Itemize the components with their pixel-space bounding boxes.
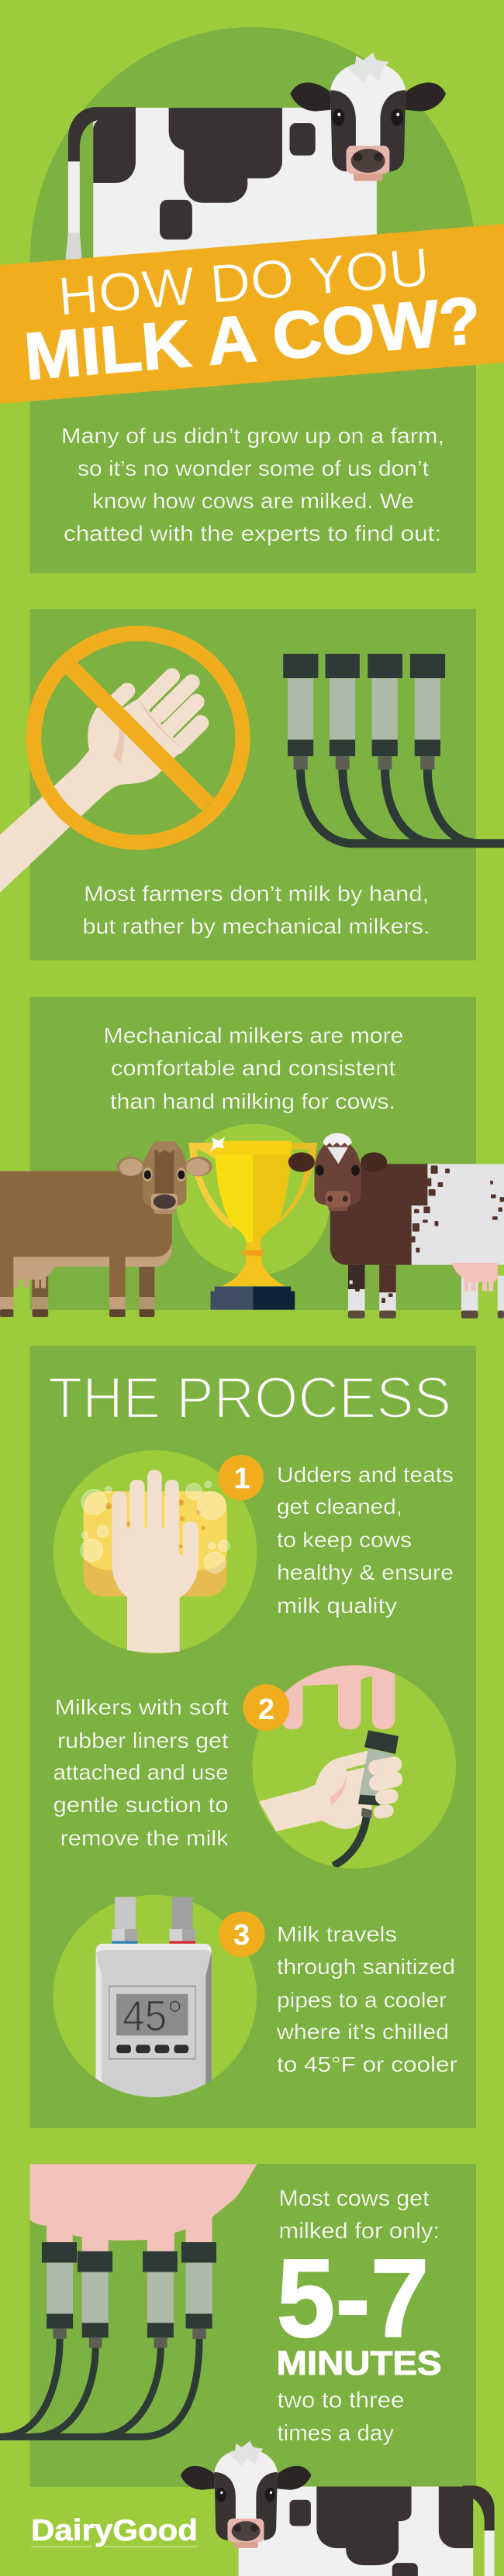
- step 3 text: [276, 1922, 457, 2076]
- caption: comfort: than hand milking for cows.: [110, 1089, 395, 1113]
- step 2 text: attached and use: [53, 1760, 228, 1784]
- panel: comfort trophy: [0, 997, 504, 1319]
- step 2 text: rubber liners get: [57, 1728, 229, 1752]
- panel: milking time: [0, 2164, 476, 2487]
- illustration: brown and white cow: [288, 1133, 504, 1319]
- milking time text: Most cows get: [279, 2186, 430, 2211]
- step 3 text: to 45°F or cooler: [277, 2052, 457, 2076]
- intro text: [61, 424, 444, 545]
- illustration: four milkers with hoses: [283, 654, 504, 844]
- illustration: holstein cow: [65, 53, 446, 266]
- milking time text: two to three: [278, 2388, 405, 2413]
- illustration: udder with milkers: [0, 2164, 257, 2437]
- caption: comfort: comfortable and consistent: [111, 1056, 395, 1080]
- caption: hand versus machine: [82, 882, 430, 938]
- milking time text: [276, 2186, 442, 2446]
- title: HOW DO YOU: [56, 236, 432, 327]
- panel: intro arch: [0, 27, 504, 573]
- cooler display reading: 45°: [123, 1991, 183, 2040]
- caption: comfort: [104, 1023, 403, 1113]
- step 2 text: [53, 1695, 230, 1850]
- step 3 text: through sanitized: [277, 1955, 455, 1979]
- title: [22, 236, 484, 394]
- intro text: so it’s no wonder some of us don’t: [78, 456, 429, 480]
- step 2 text: remove the milk: [60, 1826, 230, 1850]
- illustration: bottom cow: [181, 2441, 495, 2576]
- panel: the process: [29, 1346, 476, 2128]
- caption: hand versus machine: but rather by mechanical milkers.: [82, 914, 430, 938]
- step 1 number: 1: [234, 1463, 250, 1495]
- step 1 text: healthy & ensure: [277, 1560, 454, 1584]
- step 1 text: get cleaned,: [277, 1494, 402, 1518]
- step 2 number: 2: [258, 1694, 274, 1726]
- milking time text: 5-7: [276, 2236, 430, 2361]
- logo: DairyGood: DairyGood: [31, 2514, 198, 2547]
- step 3 illustration: cooler: [53, 1895, 265, 2100]
- banner: [0, 224, 504, 404]
- illustration: crossed out hand: [0, 626, 250, 892]
- step 1 text: to keep cows: [277, 1528, 412, 1552]
- step 2 text: Milkers with soft: [54, 1695, 229, 1719]
- intro text: know how cows are milked. We: [92, 489, 414, 513]
- step 1 illustration: hand with sponge: [54, 1450, 264, 1654]
- step 3 text: where it’s chilled: [276, 2020, 449, 2044]
- milking time text: milked for only:: [279, 2219, 440, 2244]
- intro text: Many of us didn’t grow up on a farm,: [61, 424, 444, 448]
- caption: comfort: Mechanical milkers are more: [104, 1023, 403, 1047]
- step 2 text: gentle suction to: [53, 1793, 228, 1817]
- panel: hand versus mechanical milkers: [0, 609, 504, 961]
- step 1 text: [277, 1463, 454, 1618]
- illustration: brown cow: [0, 1141, 212, 1317]
- step 1 text: milk quality: [277, 1594, 397, 1618]
- caption: hand versus machine: Most farmers don’t milk by hand,: [84, 882, 429, 906]
- step 3 text: pipes to a cooler: [277, 1988, 447, 2012]
- step 2 illustration: hand with milker: [243, 1658, 456, 1869]
- step 1 text: Udders and teats: [277, 1463, 454, 1487]
- heading: the process: THE PROCESS: [48, 1365, 451, 1430]
- milking time text: MINUTES: [276, 2344, 442, 2382]
- illustration: trophy: [176, 1124, 330, 1310]
- title: MILK A COW?: [22, 283, 484, 394]
- intro text: chatted with the experts to find out:: [64, 521, 441, 545]
- milking time text: times a day: [278, 2421, 394, 2446]
- step 3 text: Milk travels: [277, 1922, 397, 1946]
- step 3 number: 3: [233, 1919, 250, 1952]
